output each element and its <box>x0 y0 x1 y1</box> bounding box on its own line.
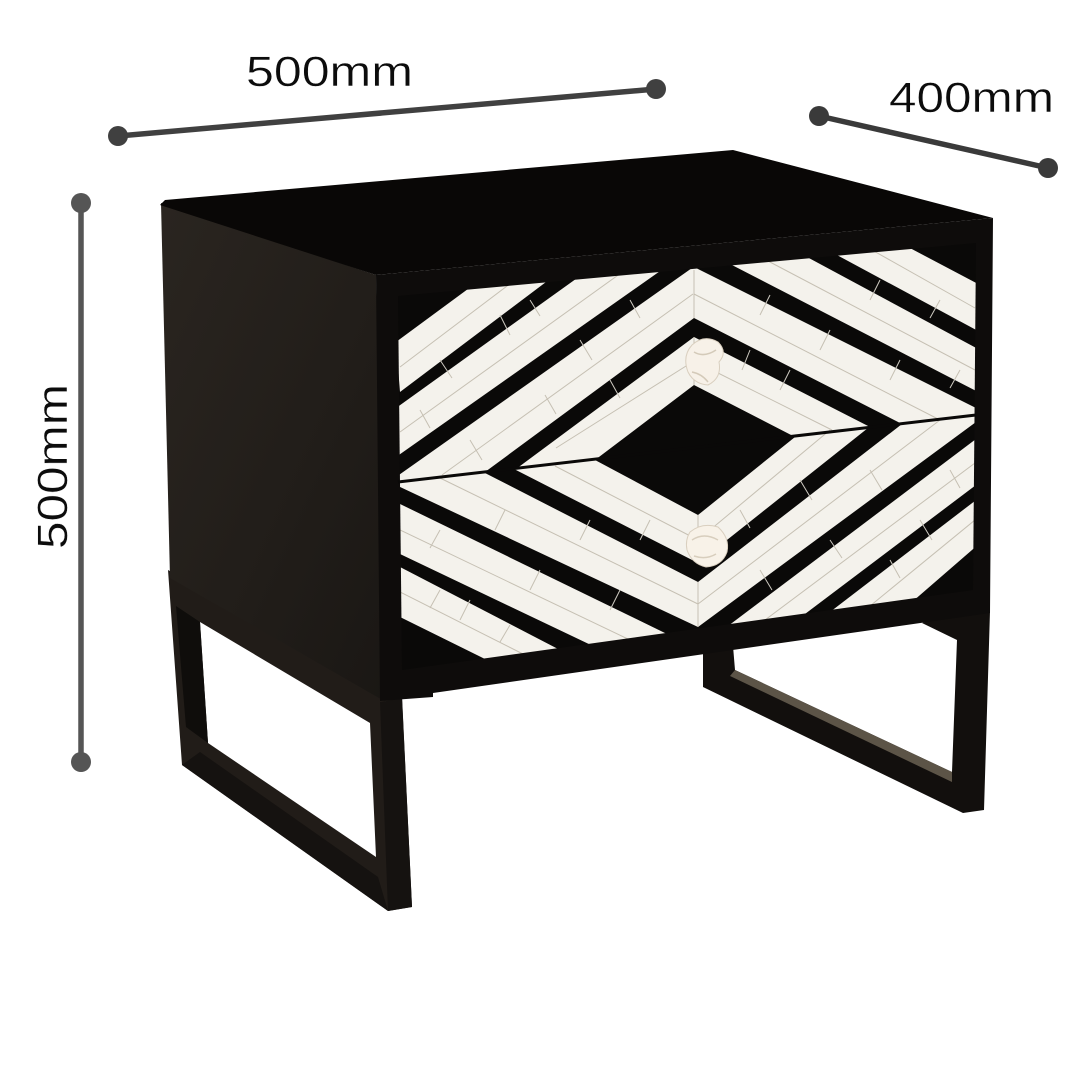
dimension: depth label: 400mm <box>889 74 1054 122</box>
dimension: width line <box>108 79 666 146</box>
front leg frame <box>168 570 412 911</box>
knob: upper drawer <box>686 339 723 385</box>
drawer fronts <box>396 243 980 670</box>
dimension: width label: 500mm <box>246 48 413 96</box>
dimension: height label: 500mm <box>29 384 77 549</box>
mosaic seams <box>400 250 975 654</box>
rear leg frame <box>703 611 990 813</box>
upper drawer bands <box>396 247 980 482</box>
drawer split line <box>398 415 976 482</box>
lower drawer bands <box>398 415 980 660</box>
drawer base <box>398 243 976 670</box>
inlay pattern <box>396 247 980 660</box>
cabinet top <box>160 150 993 275</box>
front frame <box>376 218 993 701</box>
knob: lower drawer <box>686 525 728 567</box>
cabinet side panel <box>161 203 386 702</box>
dimension: height line <box>71 193 91 772</box>
dimension: depth line <box>809 106 1058 178</box>
